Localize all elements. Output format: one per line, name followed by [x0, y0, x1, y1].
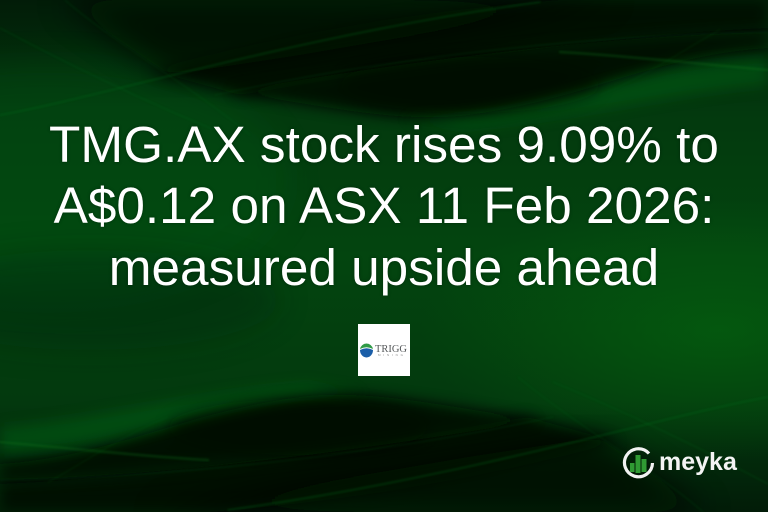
title: TMG.AX stock rises 9.09% to [49, 116, 719, 172]
title: measured upside ahead [109, 238, 659, 296]
icon: Trigg Mining logo: MINING [378, 353, 404, 357]
title: A$0.12 on ASX 11 Feb 2026: [54, 177, 714, 234]
wordmark: meyka [659, 448, 738, 476]
icon: Trigg Mining logo [358, 324, 410, 376]
icon: meyka chart ring [625, 449, 652, 477]
title [49, 116, 719, 296]
icon: Trigg Mining logo: TRIGG [375, 344, 407, 355]
icon and wordmark: meyka brand [622, 447, 738, 478]
